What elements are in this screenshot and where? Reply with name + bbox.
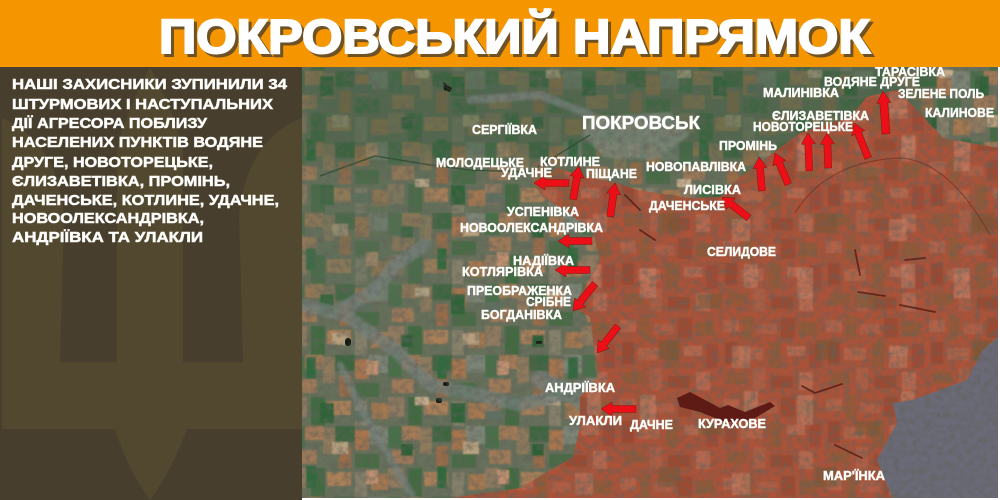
text block: summary: ДАЧЕНСЬКЕ, КОТЛИНЕ, УДАЧНЕ, xyxy=(12,193,279,209)
label: Marinka: МАР'ЇНКА xyxy=(823,468,885,483)
line: water and roads xyxy=(320,135,590,176)
arrow: Novotoretske west xyxy=(801,133,816,171)
texture: map grain xyxy=(302,67,998,498)
arrows: red attack directions xyxy=(534,91,893,416)
panel: left text panel xyxy=(0,67,302,500)
label: Novooleksandrivka: НОВООЛЕКСАНДРІВКА xyxy=(460,221,603,235)
label: Sribne: СРІБНЕ xyxy=(526,295,571,309)
label: Dachne: ДАЧНЕ xyxy=(630,418,673,432)
reservoir: Kurakhove xyxy=(677,392,775,422)
arrow: Kotlyne xyxy=(566,165,586,201)
label: Bohdanivka: БОГДАНІВКА xyxy=(481,308,562,322)
arrow: south of Bohdanivka xyxy=(591,322,623,357)
text block: summary xyxy=(12,77,287,246)
label: Kurakhove: КУРАХОВЕ xyxy=(698,417,766,431)
label: Ulakly: УЛАКЛИ xyxy=(569,414,622,428)
label: Vodiane Druhe: ВОДЯНЕ ДРУГЕ xyxy=(824,75,920,89)
label: Tarasivka: ТАРАСІВКА xyxy=(875,65,945,79)
label: Molodetske: МОЛОДЕЦЬКЕ xyxy=(436,156,524,170)
title: ПОКРОВСЬКИЙ НАПРЯМОК xyxy=(159,9,871,64)
region: darker green north xyxy=(300,60,920,160)
label: Nadiivka: НАДІЇВКА xyxy=(513,253,574,268)
label: Serhiivka: СЕРГІЇВКА xyxy=(472,122,537,137)
region: occupied territory shaded red xyxy=(450,90,998,500)
arrow: Novooleksandrivka xyxy=(558,234,592,248)
fields mosaic xyxy=(302,67,998,498)
arrow: Udachne xyxy=(534,176,569,190)
label: Preobrazhenka: ПРЕОБРАЖЕНКА xyxy=(467,284,572,298)
text block: summary: ШТУРМОВИХ І НАСТУПАЛЬНИХ xyxy=(12,97,273,113)
arrow: Pishchane xyxy=(603,182,622,218)
label: Kotliarivka: КОТЛЯРІВКА xyxy=(462,265,543,279)
arrow: Vodiane Druhe xyxy=(876,91,893,134)
label: Novotoretske: НОВОТОРЕЦЬКЕ xyxy=(753,120,853,134)
label: Malynivka: МАЛИНІВКА xyxy=(763,86,839,100)
header: orange title banner xyxy=(0,0,1000,67)
label: Selydove: СЕЛИДОВЕ xyxy=(707,245,776,259)
text block: summary: НАШІ ЗАХИСНИКИ ЗУПИНИЛИ 34 xyxy=(12,77,287,93)
label: Novopavlivka: НОВОПАВЛІВКА xyxy=(646,160,746,174)
water: dark ponds xyxy=(345,82,542,403)
label: Kotlyne: КОТЛИНЕ xyxy=(540,155,600,169)
label: Pokrovsk: ПОКРОВСЬК xyxy=(582,113,701,133)
arrow: Lysivka xyxy=(718,191,753,223)
text block: summary: ДРУГЕ, НОВОТОРЕЦЬКЕ, xyxy=(12,155,213,171)
arrow: Ulakly xyxy=(601,402,636,416)
region: river valleys xyxy=(302,95,590,495)
arrow: Sribne xyxy=(568,279,600,315)
text block: summary: НАСЕЛЕНИХ ПУНКТІВ ВОДЯНЕ xyxy=(12,135,263,151)
labels: place names on the map xyxy=(436,65,994,483)
label: Udachne: УДАЧНЕ xyxy=(501,166,552,180)
region: Donetsk grey-blue area xyxy=(877,337,998,498)
region: Pokrovsk urban area xyxy=(582,112,690,160)
arc: railway line xyxy=(795,158,990,235)
text block: summary: ДІЇ АГРЕСОРА ПОБЛИЗУ xyxy=(12,115,208,132)
map: satellite base xyxy=(300,60,998,500)
label: Uspenivka: УСПЕНІВКА xyxy=(507,205,579,219)
label: Andriivka: АНДРІЇВКА xyxy=(545,380,615,395)
label: Pishchane: ПІЩАНЕ xyxy=(586,167,637,181)
region: red field texture xyxy=(450,90,998,500)
text block: summary: НОВООЛЕКСАНДРІВКА, xyxy=(12,211,204,227)
label: Yelyzavetivka: ЄЛИЗАВЕТІВКА xyxy=(772,109,869,123)
emblem: trident watermark xyxy=(0,67,302,500)
arrow: Yelyzavetivka xyxy=(848,120,875,161)
text block: summary: ЄЛИЗАВЕТІВКА, ПРОМІНЬ, xyxy=(12,174,230,190)
arrow: Promin xyxy=(769,150,795,187)
river: dark channels xyxy=(625,195,935,458)
arrow: Novotoretske east xyxy=(820,133,835,168)
arrow: Novopavlivka xyxy=(752,156,769,191)
region: grey-green west xyxy=(302,180,432,300)
label: Dachenske: ДАЧЕНСЬКЕ xyxy=(649,199,725,213)
label: Promin: ПРОМІНЬ xyxy=(719,139,777,153)
text block: summary: АНДРІЇВКА ТА УЛАКЛИ xyxy=(12,229,203,246)
arrow: Nadiivka xyxy=(555,263,590,277)
label: Lysivka: ЛИСІВКА xyxy=(684,183,741,197)
label: Kalynove: КАЛИНОВЕ xyxy=(925,106,994,120)
label: Zelene Pole: ЗЕЛЕНЕ ПОЛЬ xyxy=(898,87,984,101)
